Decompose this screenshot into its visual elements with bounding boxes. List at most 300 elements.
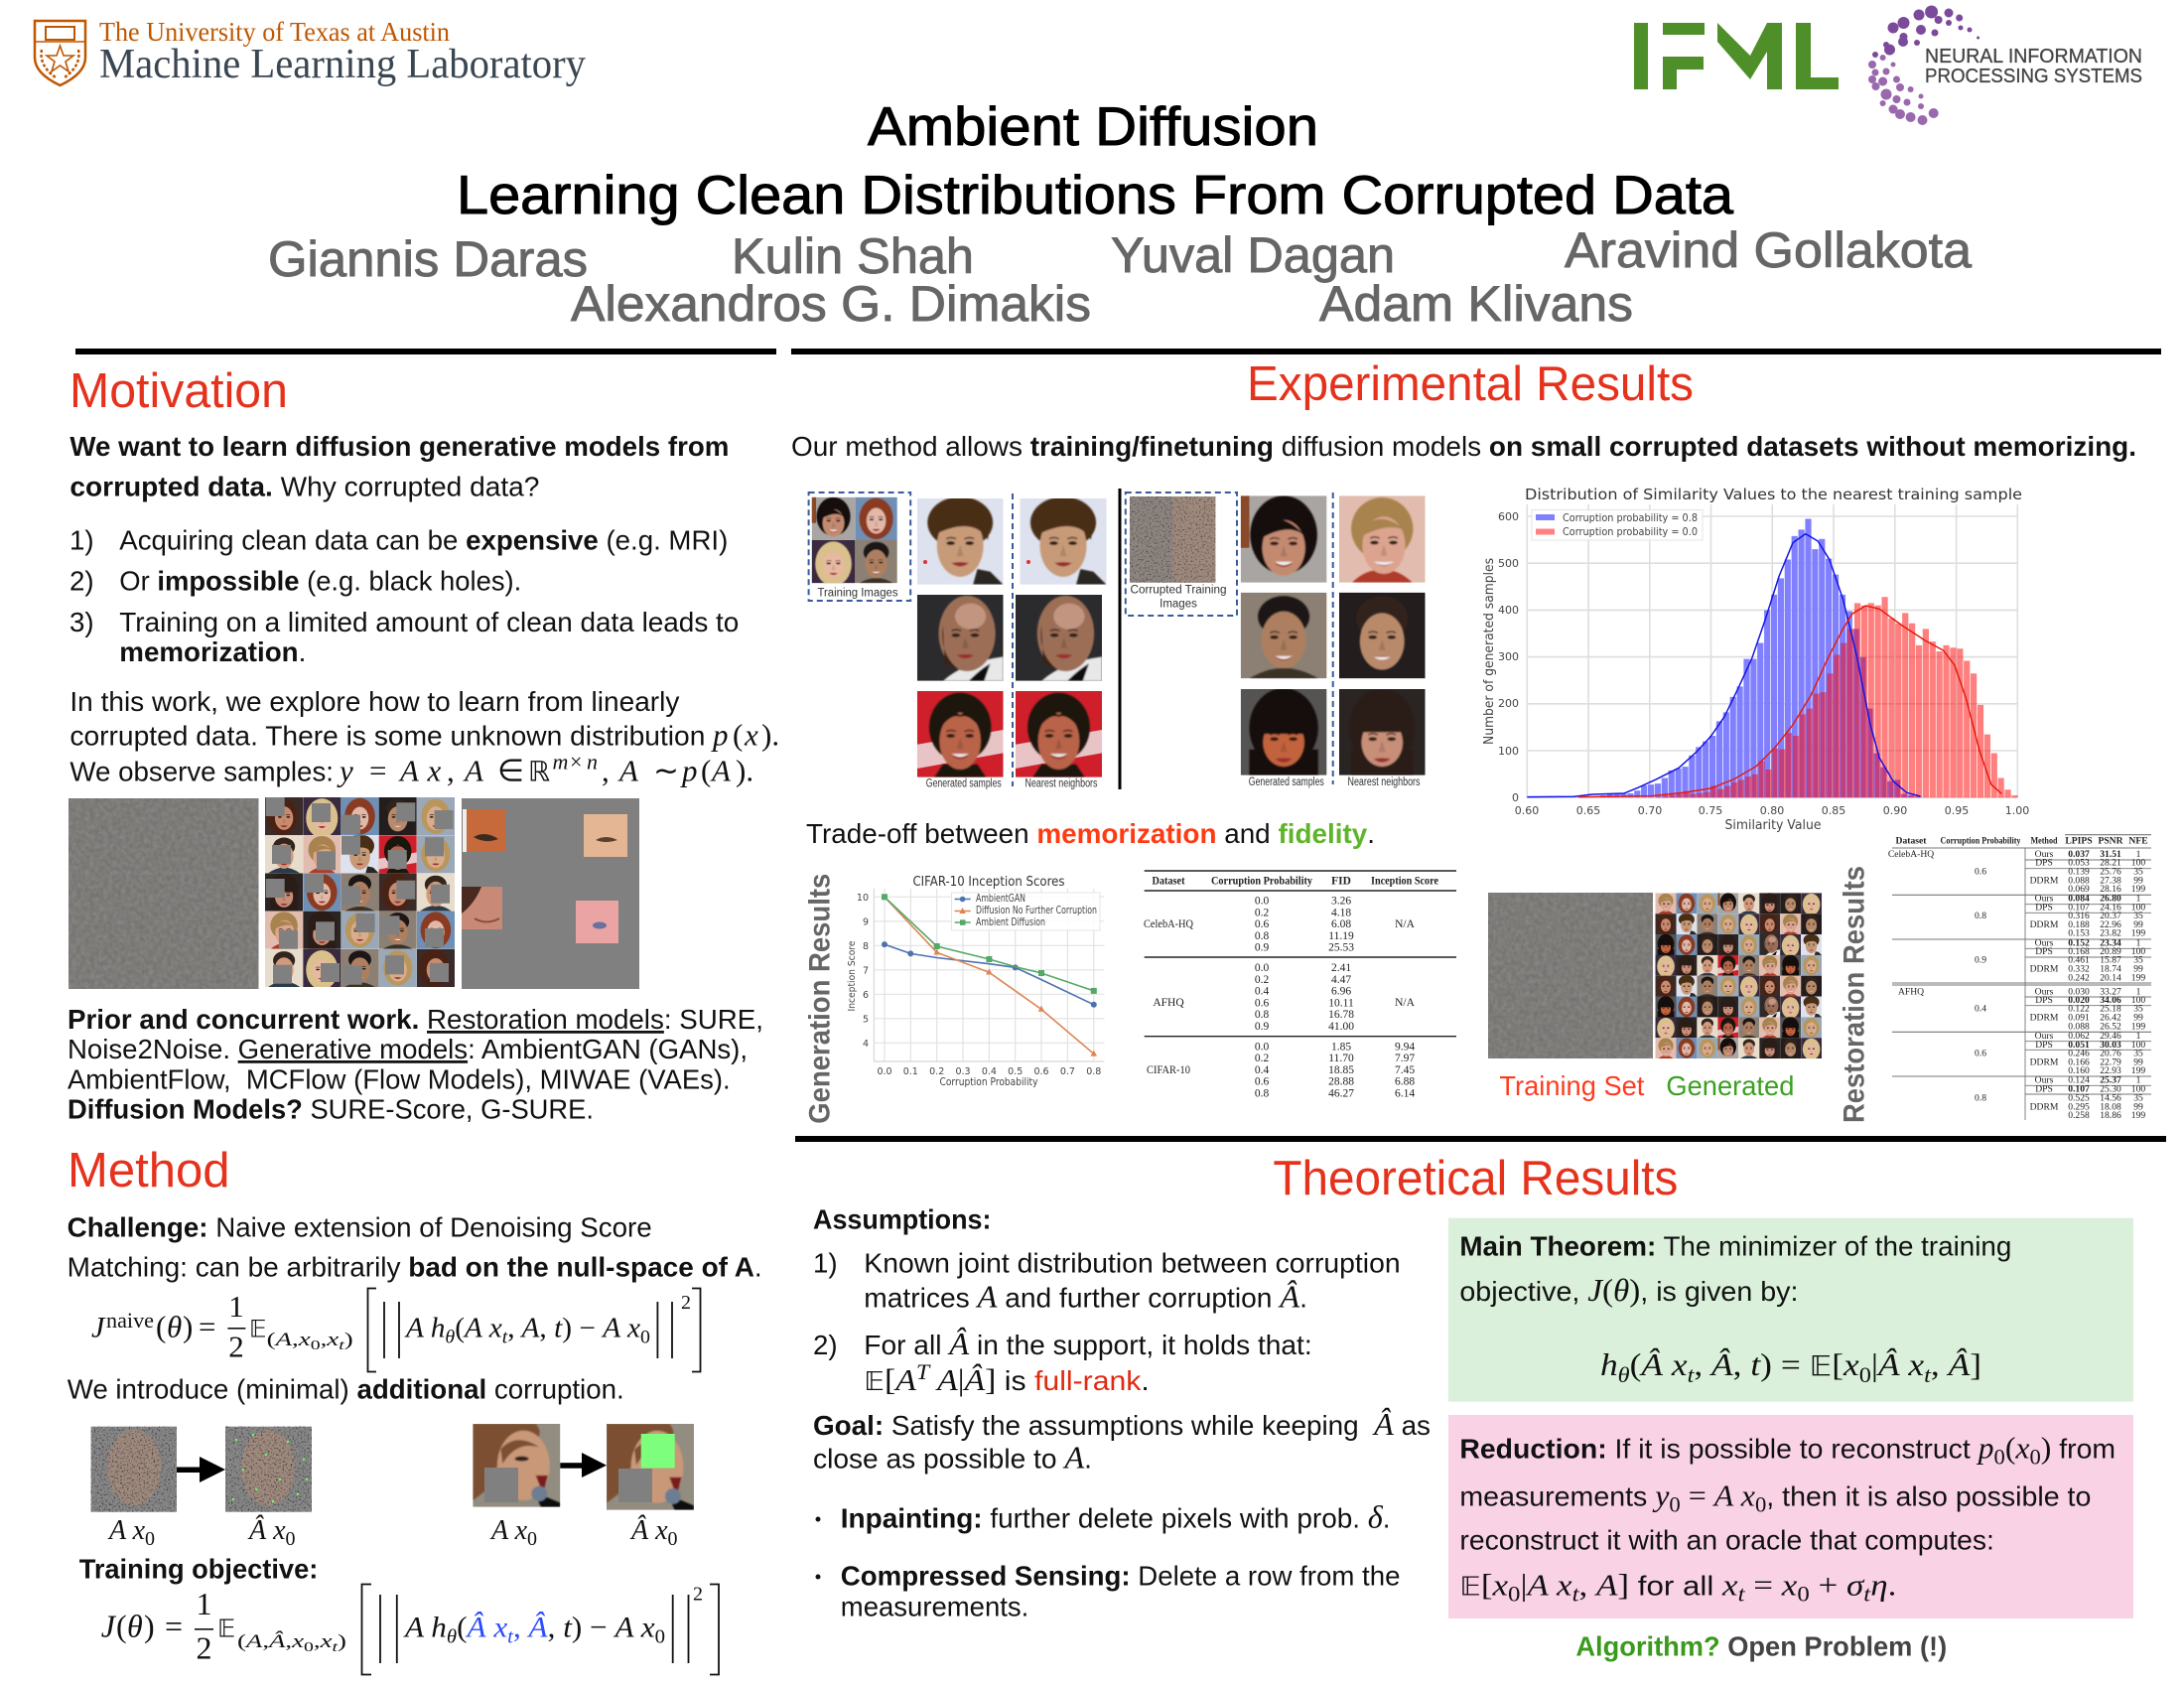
equation: training objective: ) <box>338 1631 346 1652</box>
table: generation results: 0.4 <box>1255 1064 1269 1076</box>
equation: naive objective: naive <box>106 1308 154 1333</box>
table: restoration results: 0.8 <box>1975 1092 1986 1103</box>
table: generation results: 6.14 <box>1395 1088 1415 1100</box>
text block: assumptions: 𝔼[A <box>864 1362 914 1397</box>
axis labels: 0.95 <box>1945 804 1969 817</box>
table: restoration results: Corruption Probability <box>1940 836 2021 847</box>
callout: main theorem: t <box>1924 1362 1932 1387</box>
callout: reduction: , <box>1579 1568 1596 1603</box>
callout: reduction: | <box>1520 1568 1528 1603</box>
list: inpainting and compressed sensing: Inpainting: further delete pixels with prob. δ. <box>841 1498 1391 1534</box>
table: restoration results: 26.42 <box>2100 1013 2121 1024</box>
table: restoration results: Ours <box>2035 1031 2054 1042</box>
text block: problem statement <box>69 686 779 788</box>
equation: naive objective: (A ,x <box>267 1330 307 1350</box>
table: restoration results: 0.166 <box>2068 1057 2090 1068</box>
legend: Corruption probability = 0.0 <box>1563 525 1698 538</box>
callout: reduction: , then it is also possible to <box>1766 1481 2091 1512</box>
equation: naive objective: ) <box>344 1330 353 1350</box>
axis labels: 5 <box>863 1015 869 1025</box>
legend: Ambient Diffusion <box>976 915 1045 928</box>
text block: problem statement: ℝ <box>528 756 550 788</box>
equation: training objective: ( <box>457 1611 468 1643</box>
callout: main theorem: Â, t) = 𝔼[x <box>1711 1346 1857 1382</box>
equation: training objective: = <box>165 1608 183 1643</box>
table: restoration results: 20.37 <box>2100 911 2121 921</box>
authors: Giannis Daras <box>268 231 588 287</box>
table: restoration results: 28.21 <box>2100 858 2121 869</box>
equation: training objective: t <box>333 1640 340 1655</box>
axis labels: 300 <box>1498 650 1519 663</box>
table: restoration results: 0.051 <box>2068 1040 2090 1051</box>
axis labels: 0.85 <box>1822 804 1845 817</box>
callout: reduction: ) <box>2041 1430 2051 1465</box>
table: restoration results: 100 <box>2131 995 2145 1006</box>
equation: naive objective: J <box>91 1312 106 1344</box>
logo text: Machine Learning Laboratory: Machine Learning Laboratory <box>99 42 586 87</box>
table: restoration results: 100 <box>2131 902 2145 913</box>
table: restoration results: DPS <box>2035 1040 2053 1051</box>
table: restoration results: 199 <box>2131 1065 2145 1076</box>
table: generation results: N/A <box>1395 918 1416 930</box>
table: restoration results: 23.34 <box>2100 937 2121 948</box>
table: restoration results: 22.93 <box>2100 1065 2121 1076</box>
arrow: block corruption <box>560 1453 607 1477</box>
text: trade-off: Trade-off between memorization and fidelity. <box>806 818 1375 849</box>
table: restoration results: PSNR <box>2098 836 2124 847</box>
table: restoration results: 99 <box>2133 875 2143 886</box>
text block: assumptions: matrices A and further corruption Â. <box>864 1279 1307 1315</box>
table: restoration results: 199 <box>2131 884 2145 895</box>
list: reasons for corrupted data: 1) <box>69 524 94 555</box>
table: restoration results: 34.06 <box>2100 995 2121 1006</box>
table: restoration results: 0.152 <box>2068 937 2090 948</box>
text block: problem statement: m <box>552 750 568 774</box>
chart: similarity distribution histogram: Distribution of Similarity Values to the nearest training sample <box>1525 486 2022 503</box>
table: generation results: FID <box>1331 876 1351 888</box>
text block: challenge <box>68 1211 762 1283</box>
table: restoration results: Ours <box>2035 894 2054 905</box>
axis labels: 8 <box>863 941 869 952</box>
authors: Adam Klivans <box>1319 276 1633 332</box>
table: restoration results: 0.124 <box>2068 1075 2090 1086</box>
list: inpainting and compressed sensing <box>816 1498 1400 1621</box>
text block: problem statement: ). <box>736 754 753 788</box>
labels: corruption images: 0 <box>145 1528 155 1550</box>
text block: prior and concurrent work: Noise2Noise. Generative models: AmbientGAN (GANs), <box>68 1034 748 1064</box>
heading: Theoretical Results: Theoretical Results <box>1273 1152 1678 1205</box>
table: restoration results: 0.6 <box>1975 1049 1986 1059</box>
equation: naive objective: θ <box>445 1328 455 1348</box>
line: Diffusion No Further Corruption <box>885 897 1097 1056</box>
text block: goal: close as possible to A. <box>813 1439 1092 1475</box>
table: restoration results: 0.107 <box>2068 902 2090 913</box>
table: restoration results: 15.87 <box>2100 955 2121 966</box>
table: restoration results: 26.80 <box>2100 894 2121 905</box>
text block: challenge: Challenge: Naive extension of Denoising Score <box>68 1211 652 1242</box>
generated samples and neighbors, clean training <box>917 493 1106 789</box>
table: restoration results: 0.295 <box>2068 1101 2090 1112</box>
table: restoration results: DPS <box>2035 1084 2053 1095</box>
axis labels: 0.8 <box>1086 1066 1101 1077</box>
callout: reduction: σ <box>1846 1568 1865 1603</box>
text block: problem statement: p <box>711 718 729 753</box>
table: restoration results: 0.6 <box>1975 866 1986 877</box>
table: restoration results: 0.053 <box>2068 858 2090 869</box>
callout: reduction: ( <box>2005 1430 2015 1465</box>
table: generation results: 18.85 <box>1328 1064 1354 1076</box>
axis labels: 0.65 <box>1576 804 1600 817</box>
histogram bars: corruption probability 0.0 <box>1656 597 2018 797</box>
text block: problem statement: A <box>710 754 732 788</box>
table: restoration results: 0.4 <box>1975 1004 1986 1015</box>
text block: problem statement: , <box>447 754 455 788</box>
table: restoration results: 35 <box>2133 911 2143 921</box>
table: restoration results: Ours <box>2035 849 2054 860</box>
callout: reduction: + <box>1810 1568 1846 1603</box>
table: restoration results: 0.020 <box>2068 995 2090 1006</box>
text block: problem statement: A <box>617 754 639 788</box>
training images box: Training Images <box>818 588 898 600</box>
axis labels: 0.3 <box>955 1066 971 1077</box>
table: generation results: 0.4 <box>1255 986 1269 998</box>
equation: naive objective: x <box>326 1330 340 1350</box>
table: generation results: 0.2 <box>1255 1053 1269 1064</box>
axis labels: 0.7 <box>1060 1066 1075 1077</box>
axis labels: 0.4 <box>982 1066 997 1077</box>
equation: training objective: A h <box>405 1611 445 1643</box>
callout: reduction <box>1448 1415 2133 1618</box>
table: restoration results: 35 <box>2133 1092 2143 1103</box>
table: restoration results: 0.160 <box>2068 1065 2090 1076</box>
table: restoration results: 24.16 <box>2100 902 2121 913</box>
text block: assumptions: Assumptions: <box>813 1203 991 1234</box>
equation: naive objective: t <box>502 1328 508 1348</box>
table: generation results: 7.97 <box>1395 1053 1415 1064</box>
generated samples and neighbors, corrupted training: Nearest neighbors <box>1348 776 1421 788</box>
table: generation results: 0.6 <box>1255 1076 1269 1088</box>
table: restoration results: 199 <box>2131 972 2145 983</box>
image: block corruption after <box>607 1424 694 1510</box>
table: restoration results: AFHQ <box>1898 986 1924 997</box>
text block: problem statement: = <box>369 754 386 788</box>
image: speckle corruption before <box>91 1427 177 1512</box>
callout: main theorem: Â x <box>1641 1346 1683 1382</box>
callout: main theorem: 0 <box>1859 1362 1871 1387</box>
callout: main theorem: θ <box>1618 1362 1630 1387</box>
table: restoration results: 0.188 <box>2068 919 2090 930</box>
equation: training objective: J <box>101 1608 117 1643</box>
text block: problem statement: ( <box>733 718 743 753</box>
table: restoration results: 18.86 <box>2100 1110 2121 1121</box>
text block: problem statement: A <box>463 754 484 788</box>
text: additional corruption: We introduce (minimal) additional corruption. <box>68 1373 624 1404</box>
callout: reduction: t <box>1738 1582 1745 1607</box>
panel: experimental results <box>791 357 2151 1124</box>
table: restoration results: DPS <box>2035 995 2053 1006</box>
table: generation results: 4.47 <box>1331 974 1351 986</box>
table: generation results: 0.0 <box>1255 896 1269 908</box>
axis labels: 500 <box>1498 557 1519 570</box>
table: restoration results: 35 <box>2133 1049 2143 1059</box>
table: generation results: AFHQ <box>1153 997 1184 1009</box>
histogram bars: corruption probability 0.8 <box>1600 518 1921 797</box>
axis labels: Inception Score <box>847 941 858 1011</box>
legend <box>1532 510 1703 540</box>
callout: reduction: A] for all x <box>1596 1568 1736 1603</box>
table: generation results: 0.9 <box>1255 942 1269 954</box>
axis labels: 0.5 <box>1008 1066 1023 1077</box>
table: restoration results: 0.168 <box>2068 946 2090 957</box>
logo text: Neural Information Processing Systems <box>1925 46 2142 87</box>
table: restoration results: 99 <box>2133 1013 2143 1024</box>
callout: reduction: x <box>1781 1568 1798 1603</box>
callout: reduction: η <box>1870 1568 1888 1603</box>
equation: naive objective: ) <box>183 1310 193 1344</box>
authors: Yuval Dagan <box>1111 227 1395 283</box>
equation: naive objective: A, t) − A x <box>521 1314 638 1344</box>
axis labels: Number of generated samples <box>1482 558 1497 745</box>
callout: reduction: 𝔼[x <box>1459 1568 1506 1603</box>
table: generation results: 28.88 <box>1328 1076 1354 1088</box>
legend <box>951 892 1100 930</box>
text block: problem statement: p <box>680 754 697 788</box>
text block: problem statement: A <box>398 754 420 788</box>
axis labels: Similarity Value <box>1725 817 1821 833</box>
table: generation results: Dataset <box>1152 876 1185 888</box>
legend: AmbientGAN <box>976 892 1025 905</box>
callout: main theorem <box>1448 1218 2133 1402</box>
list: reasons for corrupted data: Or impossible (e.g. black holes). <box>119 566 521 597</box>
axis labels <box>847 893 1101 1088</box>
table: restoration results: DDRM <box>2030 875 2059 886</box>
image: noisy training set <box>1488 893 1653 1058</box>
callout: main theorem: ( <box>1630 1346 1641 1382</box>
chart: CIFAR-10 inception scores: CIFAR-10 Inception Scores <box>913 875 1065 890</box>
panel: memorization comparison <box>809 489 1426 789</box>
table: generation results: 11.19 <box>1328 930 1354 942</box>
labels: corruption images: 0 <box>527 1528 537 1550</box>
equation: training objective: θ <box>447 1625 457 1647</box>
table: restoration results: 0.525 <box>2068 1092 2090 1103</box>
table: generation results: 0.6 <box>1255 918 1269 930</box>
list: reasons for corrupted data: Acquiring clean data can be expensive (e.g. MRI) <box>119 524 728 555</box>
callout: reduction: reconstruct it with an oracle that computes: <box>1459 1525 1994 1556</box>
equation: naive objective <box>91 1289 701 1372</box>
text block: problem statement: ∼ <box>653 754 679 788</box>
table: generation results: 4.18 <box>1331 907 1351 918</box>
table: generation results: CIFAR-10 <box>1147 1064 1190 1076</box>
callout: main theorem: Main Theorem: The minimizer of the training <box>1459 1230 2011 1261</box>
text block: prior and concurrent work: AmbientFlow, MCFlow (Flow Models), MIWAE (VAEs). <box>68 1064 731 1095</box>
authors: Kulin Shah <box>732 228 974 284</box>
table: generation results: 6.88 <box>1395 1076 1415 1088</box>
table: generation results: 9.94 <box>1395 1041 1415 1053</box>
table: restoration results: 35 <box>2133 866 2143 877</box>
table: restoration results: 14.56 <box>2100 1092 2121 1103</box>
table: generation results: 0.2 <box>1255 907 1269 918</box>
axis labels: 1.00 <box>2005 804 2029 817</box>
line: Ambient Diffusion <box>882 894 1097 994</box>
equation: training objective: Â x <box>465 1611 508 1643</box>
callout: main theorem: Â] <box>1949 1346 1980 1382</box>
image: noise corrupted samples <box>68 798 258 989</box>
table: restoration results: LPIPS <box>2065 836 2093 847</box>
table: restoration results: 0.062 <box>2068 1031 2090 1042</box>
table: restoration results: 25.18 <box>2100 1004 2121 1015</box>
generated samples and neighbors, clean training: Nearest neighbors <box>1024 777 1098 789</box>
axis labels: 0 <box>1512 791 1519 804</box>
corrupted training images box: Corrupted Training <box>1130 585 1227 597</box>
equation: training objective: 2 <box>197 1630 212 1666</box>
table: generation results: 11.70 <box>1328 1053 1354 1064</box>
callout: reduction: = <box>1745 1568 1782 1603</box>
text block: problem statement: ( <box>701 754 711 788</box>
axis labels: 0.6 <box>1033 1066 1049 1077</box>
heading: Experimental Results: Experimental Results <box>1247 357 1694 411</box>
text block: motivation intro <box>69 431 729 501</box>
axis labels: 400 <box>1498 604 1519 617</box>
corrupted training images box: Images <box>1160 599 1197 611</box>
text: method summary: Our method allows training/finetuning diffusion models on small corrupted datasets without memorizing. <box>791 431 2136 462</box>
table: restoration results: 1 <box>2136 937 2141 948</box>
table: restoration results: 0.122 <box>2068 1004 2090 1015</box>
list: reasons for corrupted data: 3) <box>69 607 94 637</box>
equation: naive objective: A x <box>465 1314 500 1344</box>
table: restoration results: 20.89 <box>2100 946 2121 957</box>
list: reasons for corrupted data <box>69 524 739 667</box>
text block: problem statement: ∈ <box>497 754 524 788</box>
table: restoration results: 30.03 <box>2100 1040 2121 1051</box>
text block: problem statement: corrupted data. There is some unknown distribution <box>69 721 705 752</box>
table: restoration results: 35 <box>2133 955 2143 966</box>
heading: Motivation: Motivation <box>69 364 288 418</box>
chart: CIFAR-10 inception scores <box>847 875 1104 1088</box>
table: restoration results: 22.96 <box>2100 919 2121 930</box>
table: restoration results: 100 <box>2131 946 2145 957</box>
legend: Diffusion No Further Corruption <box>976 904 1097 916</box>
table: restoration results: 0.316 <box>2068 911 2090 921</box>
table: restoration results: 99 <box>2133 919 2143 930</box>
table: restoration results: 23.82 <box>2100 928 2121 939</box>
labels: corruption images: A x <box>491 1515 527 1546</box>
callout: main theorem: t <box>1688 1362 1695 1387</box>
table: restoration results: 1 <box>2136 849 2141 860</box>
text block: motivation intro: We want to learn diffusion generative models from <box>69 431 729 462</box>
equation: training objective: , <box>314 1631 321 1652</box>
table: restoration results: 1 <box>2136 986 2141 997</box>
authors: Alexandros G. Dimakis <box>571 276 1091 332</box>
table: generation results: Inception Score <box>1371 876 1438 888</box>
table: restoration results: 0.258 <box>2068 1110 2090 1121</box>
text block: problem statement: In this work, we explore how to learn from linearly <box>69 686 680 717</box>
equation: training objective: θ <box>127 1608 143 1643</box>
label: Restoration Results: Restoration Results <box>1839 866 1871 1123</box>
table: generation results: 46.27 <box>1328 1088 1354 1100</box>
authors <box>268 222 1972 332</box>
equation: training objective: 𝔼 <box>217 1614 235 1642</box>
table: generation results: 2.41 <box>1331 962 1351 974</box>
table: restoration results: 0.084 <box>2068 894 2090 905</box>
callout: reduction: Reduction: If it is possible to reconstruct p <box>1459 1430 1993 1465</box>
callout: reduction: A x <box>1712 1478 1755 1513</box>
equation: training objective: 1 <box>197 1586 212 1621</box>
axis labels: 4 <box>863 1039 869 1050</box>
table: restoration results: 26.52 <box>2100 1022 2121 1033</box>
axis labels: 200 <box>1498 697 1519 710</box>
table: restoration results: 199 <box>2131 1110 2145 1121</box>
labels: training set and generated: Training Set <box>1499 1070 1645 1101</box>
text block: prior and concurrent work <box>68 1004 763 1125</box>
title <box>457 95 1733 225</box>
table: generation results: 0.6 <box>1255 997 1269 1009</box>
logo: IFML <box>1634 23 1839 89</box>
generated samples and neighbors, clean training: Generated samples <box>926 777 1002 789</box>
table: restoration results: 20.76 <box>2100 1049 2121 1059</box>
axis labels: 6 <box>863 990 869 1001</box>
table: restoration results: DPS <box>2035 902 2053 913</box>
table: generation results: 25.53 <box>1328 942 1354 954</box>
table: generation results: 6.96 <box>1331 986 1351 998</box>
axis labels: 100 <box>1498 745 1519 758</box>
callout: reduction: 0 <box>1669 1492 1681 1517</box>
text block: assumptions: Known joint distribution between corruption <box>864 1248 1401 1279</box>
table: restoration results: 0.037 <box>2068 849 2090 860</box>
callout: reduction: 0 <box>1994 1444 2005 1469</box>
table: generation results: 0.0 <box>1255 962 1269 974</box>
callout: reduction: . <box>1888 1568 1896 1603</box>
table: generation results: N/A <box>1395 997 1416 1009</box>
table: generation results: 0.8 <box>1255 1009 1269 1021</box>
heading: Method: Method <box>68 1144 230 1197</box>
table: restoration results: Method <box>2031 836 2058 847</box>
table: restoration results: 0.8 <box>1975 911 1986 921</box>
logo text: Neural Information Processing Systems: NEURAL INFORMATION <box>1925 46 2142 68</box>
chart: similarity distribution histogram <box>1482 486 2029 833</box>
title: Learning Clean Distributions From Corrupted Data <box>457 164 1733 225</box>
text block: problem statement: y <box>337 754 353 788</box>
table: restoration results: 100 <box>2131 1084 2145 1095</box>
labels: corruption images: Â x <box>249 1515 286 1546</box>
panel: theoretical results <box>813 1152 2133 1661</box>
logo: NeurIPS dots <box>1868 6 1979 125</box>
equation: training objective: ( <box>116 1608 127 1643</box>
table: restoration results: 99 <box>2133 964 2143 975</box>
list: inpainting and compressed sensing: Compressed Sensing: Delete a row from the <box>841 1561 1400 1592</box>
callout: reduction: 0 <box>1755 1492 1766 1517</box>
table: restoration results: 0.153 <box>2068 928 2090 939</box>
table: restoration results: 199 <box>2131 1022 2145 1033</box>
callout: main theorem: , <box>1694 1346 1711 1382</box>
table: generation results <box>1144 871 1456 1100</box>
equation: training objective: x <box>319 1631 333 1652</box>
callout: reduction: A x <box>1525 1568 1572 1603</box>
title: Ambient Diffusion <box>868 95 1318 157</box>
table: generation results: 41.00 <box>1328 1021 1354 1033</box>
table: restoration results: 25.76 <box>2100 866 2121 877</box>
text: training objective: Training objective: <box>79 1553 318 1584</box>
table: restoration results: 99 <box>2133 1057 2143 1068</box>
axis labels: 9 <box>863 917 869 927</box>
text block: prior and concurrent work: Prior and concurrent work. Restoration models: SURE, <box>68 1004 763 1035</box>
axis labels: 0.2 <box>929 1066 944 1077</box>
table: generation results: 0.8 <box>1255 930 1269 942</box>
equation: naive objective: 2 <box>228 1330 244 1364</box>
equation: naive objective: θ <box>167 1310 182 1344</box>
panel: motivation <box>68 364 779 1125</box>
equation: naive objective: 2 <box>681 1292 691 1314</box>
callout: reduction: t <box>1863 1582 1871 1607</box>
